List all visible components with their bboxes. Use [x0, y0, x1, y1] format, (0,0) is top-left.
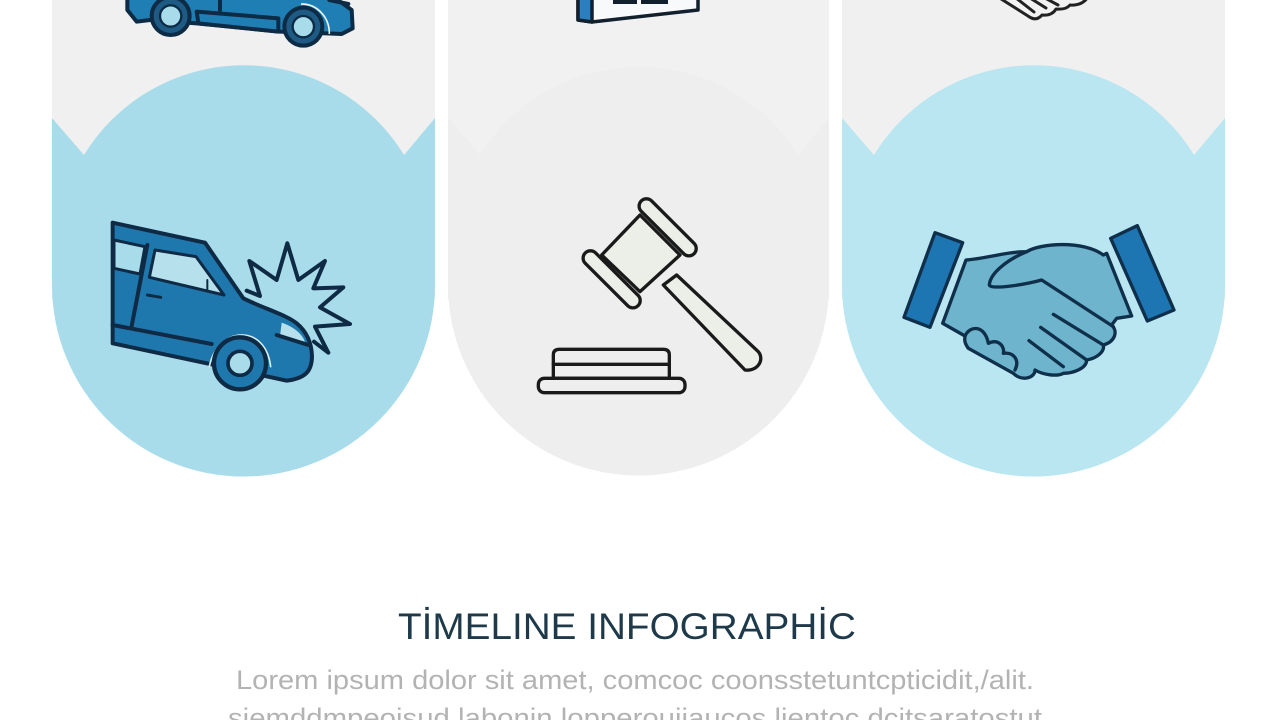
panel: court: [448, 0, 829, 476]
panel top: settlement: [842, 0, 1225, 300]
panel: accident: [52, 0, 435, 477]
panel lower shape: settlement: [842, 65, 1225, 476]
icon: sign (cropped): [578, 0, 698, 22]
icon: car crash: [113, 223, 350, 389]
panel lower shape: court: [448, 67, 829, 475]
panel lower shape: accident: [52, 65, 435, 476]
panel top: court: [448, 0, 829, 300]
description line 1: Lorem ipsum dolor sit amet, comcoc coonsstetuntcpticidit,/alit.: [236, 665, 1034, 695]
icon: handshake: [904, 226, 1174, 378]
icon: gavel: [538, 196, 761, 393]
icon: handshake outline (cropped): [998, 0, 1088, 19]
icon: car (cropped): [127, 0, 353, 46]
title: TİMELINE INFOGRAPHİC: [398, 606, 856, 647]
panel top: accident: [52, 0, 435, 300]
text block: description: [228, 665, 1043, 720]
panel: settlement: [842, 0, 1225, 476]
